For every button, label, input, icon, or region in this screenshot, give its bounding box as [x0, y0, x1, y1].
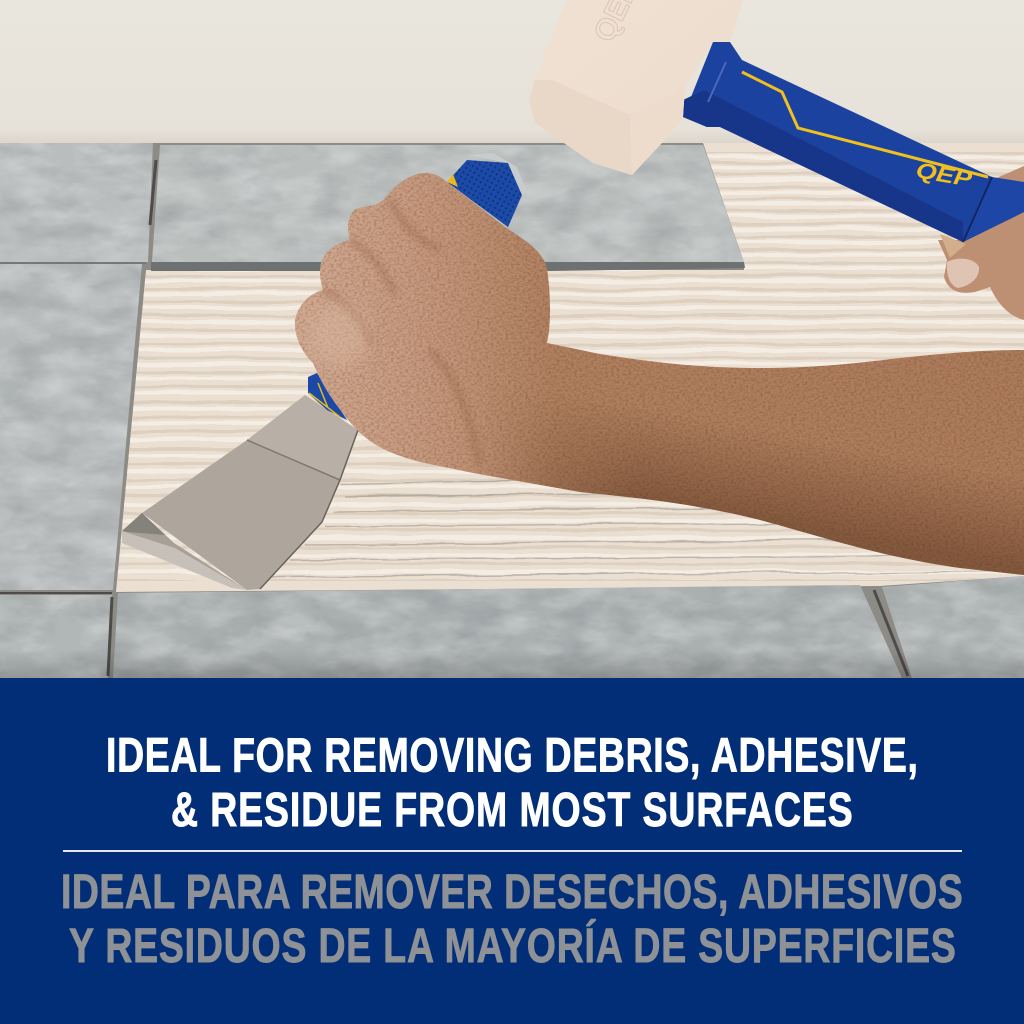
- arm and hand: [295, 173, 1024, 575]
- photo scene: [0, 0, 1024, 678]
- mallet head: [529, 0, 743, 175]
- hand highlight: [310, 303, 370, 367]
- tool: scraper blade: [122, 395, 358, 590]
- tile: bottom left: [0, 595, 112, 678]
- heading: Spanish line 1: IDEAL PARA REMOVER DESECHOS, ADHESIVOS: [61, 866, 963, 919]
- tile: left: [0, 264, 142, 590]
- heading: Spanish line 2: Y RESIDUOS DE LA MAYORÍA DE SUPERFICIES: [69, 920, 956, 973]
- tile: lifted top centre: [152, 145, 744, 262]
- tile edge: [151, 262, 745, 271]
- tile: top left: [0, 143, 153, 262]
- dark grout lines: [0, 160, 908, 676]
- knuckle shadows: [323, 200, 480, 465]
- right hand: [938, 166, 1024, 320]
- heading: English line 2: & RESIDUE FROM MOST SURFACES: [171, 784, 853, 837]
- floor shadow at the panel edge: [0, 656, 1024, 678]
- tile group: [0, 143, 1024, 678]
- grout base: [0, 143, 1024, 678]
- panel: text band: [0, 678, 1024, 1024]
- wall: [0, 0, 1024, 143]
- adhesive bed: [116, 143, 1024, 592]
- tile: bottom right: [882, 576, 1024, 678]
- divider: [63, 850, 962, 852]
- handle logo: QEP: [914, 157, 974, 192]
- tool: scraper handle bottom: [308, 373, 347, 420]
- arm shading: [506, 420, 1024, 575]
- tile: bottom centre: [113, 585, 902, 678]
- tool: scraper handle top: [447, 153, 526, 227]
- heading: English line 1: IDEAL FOR REMOVING DEBRIS, ADHESIVE,: [106, 729, 918, 783]
- mallet handle: [683, 42, 1024, 242]
